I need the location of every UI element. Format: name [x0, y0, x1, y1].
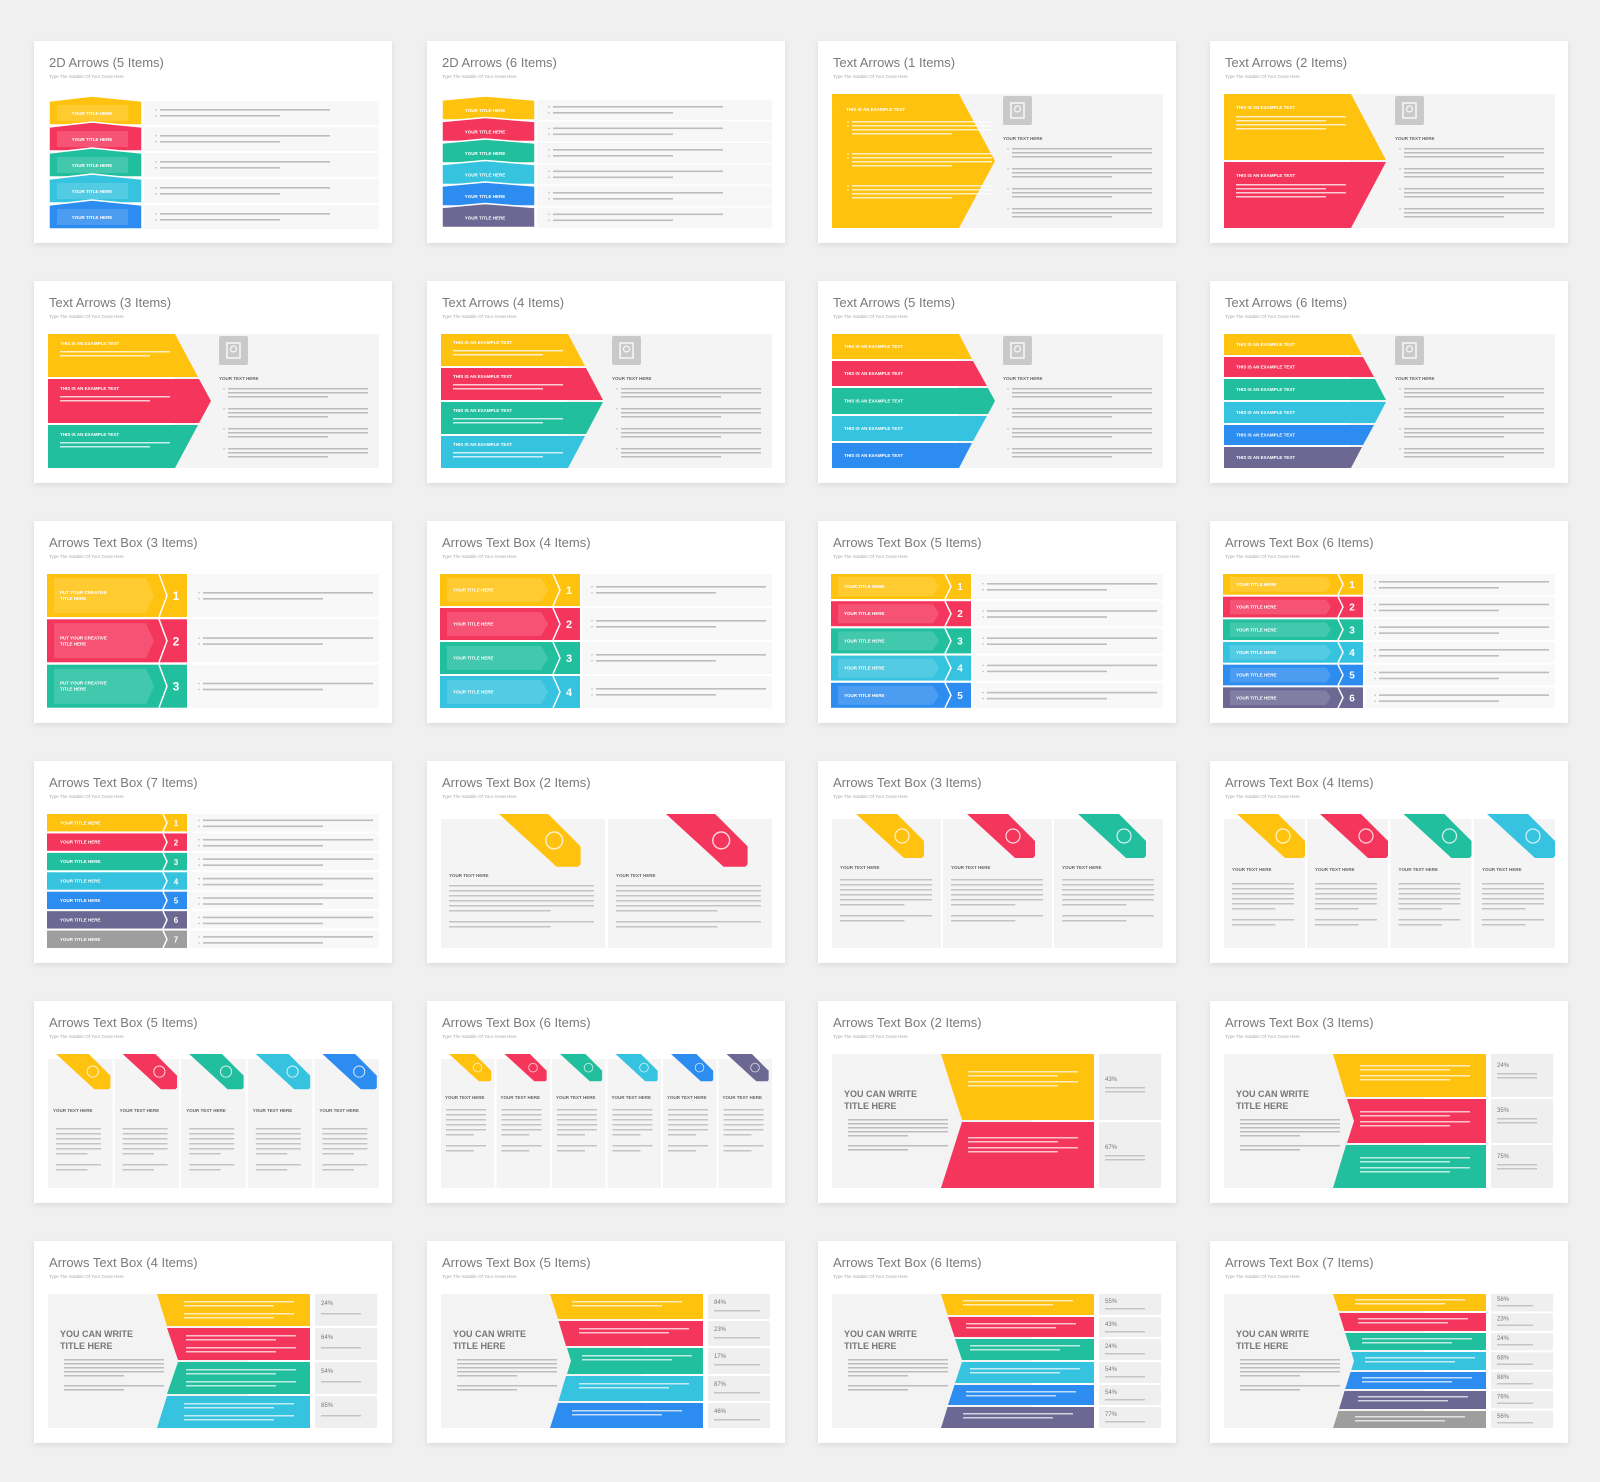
slide 5: Text Arrows (3 Items) [34, 281, 392, 483]
slide 6: Text Arrows (4 Items): THIS IS AN EXAMPLE TEXT [453, 340, 512, 345]
slide 2: 2D Arrows (6 Items): YOUR TITLE HERE [465, 216, 505, 220]
slide 23: Arrows Text Box (6 Items) title panel: 54% [1105, 1390, 1118, 1396]
slide 23: Arrows Text Box (6 Items) title panel: TITLE HERE [844, 1341, 897, 1351]
slide 10: Arrows Text Box (4 Items) numbered: 2 [566, 619, 572, 631]
slide 3: Text Arrows (1 Items): THIS IS AN EXAMPLE TEXT [846, 107, 905, 112]
slide 18: Arrows Text Box (6 Items) columns: YOUR TEXT HERE [500, 1095, 540, 1100]
slide 8: Text Arrows (6 Items): THIS IS AN EXAMPLE TEXT [1236, 387, 1295, 392]
slide 9: Arrows Text Box (3 Items) numbered: TITLE HERE [60, 596, 86, 601]
slide 7: Text Arrows (5 Items): THIS IS AN EXAMPLE TEXT [844, 371, 903, 376]
slide 2: 2D Arrows (6 Items): Type The Subtitle Of Your Great Here [442, 74, 517, 79]
slide 2: 2D Arrows (6 Items): 2D Arrows (6 Items) [442, 55, 557, 70]
slide 24: Arrows Text Box (7 Items) title panel: 68% [1497, 1356, 1510, 1362]
slide 4: Text Arrows (2 Items): THIS IS AN EXAMPLE TEXT [1236, 173, 1295, 178]
slide 15: Arrows Text Box (3 Items) columns: YOUR TEXT HERE [840, 865, 880, 870]
slide 11: Arrows Text Box (5 Items) numbered: Type The Subtitle Of Your Great Here [833, 554, 908, 559]
slide 19: Arrows Text Box (2 Items) title panel [818, 1001, 1176, 1203]
slide 21: Arrows Text Box (4 Items) title panel: 54% [321, 1369, 334, 1375]
slide 1: 2D Arrows (5 Items): 2D Arrows (5 Items) [49, 55, 164, 70]
slide 22: Arrows Text Box (5 Items) title panel: 23% [714, 1327, 727, 1333]
slide 8: Text Arrows (6 Items): YOUR TEXT HERE [1395, 376, 1435, 381]
slide 3: Text Arrows (1 Items): Type The Subtitle Of Your Great Here [833, 74, 908, 79]
slide 12: Arrows Text Box (6 Items) numbered: YOUR TITLE HERE [1236, 627, 1277, 632]
slide 8: Text Arrows (6 Items): THIS IS AN EXAMPLE TEXT [1236, 342, 1295, 347]
slide 12: Arrows Text Box (6 Items) numbered: Type The Subtitle Of Your Great Here [1225, 554, 1300, 559]
slide 6: Text Arrows (4 Items): THIS IS AN EXAMPLE TEXT [453, 442, 512, 447]
slide 21: Arrows Text Box (4 Items) title panel [34, 1241, 392, 1443]
slide 10: Arrows Text Box (4 Items) numbered: Arrows Text Box (4 Items) [442, 535, 591, 550]
slide 13: Arrows Text Box (7 Items) numbered: YOUR TITLE HERE [60, 917, 101, 922]
slide 2: 2D Arrows (6 Items): YOUR TITLE HERE [465, 194, 505, 199]
slide 9: Arrows Text Box (3 Items) numbered: 1 [173, 589, 180, 603]
slide 2: 2D Arrows (6 Items): YOUR TITLE HERE [465, 130, 505, 134]
slide 13: Arrows Text Box (7 Items) numbered: YOUR TITLE HERE [60, 898, 101, 903]
slide 22: Arrows Text Box (5 Items) title panel: YOU CAN WRITE [453, 1329, 526, 1339]
slide 5: Text Arrows (3 Items): THIS IS AN EXAMPLE TEXT [60, 341, 119, 346]
slide 23: Arrows Text Box (6 Items) title panel: 54% [1105, 1367, 1118, 1373]
slide 4: Text Arrows (2 Items) [1210, 41, 1568, 243]
slide 12: Arrows Text Box (6 Items) numbered: 3 [1349, 625, 1355, 636]
slide 17: Arrows Text Box (5 Items) columns: Arrows Text Box (5 Items) [49, 1015, 198, 1030]
slide 20: Arrows Text Box (3 Items) title panel: YOU CAN WRITE [1236, 1089, 1309, 1099]
slide 3: Text Arrows (1 Items) [818, 41, 1176, 243]
slide 24: Arrows Text Box (7 Items) title panel: 76% [1497, 1394, 1510, 1400]
slide 11: Arrows Text Box (5 Items) numbered: 2 [957, 609, 963, 620]
slide 7: Text Arrows (5 Items): THIS IS AN EXAMPLE TEXT [844, 398, 903, 404]
slide 9: Arrows Text Box (3 Items) numbered: PUT YOUR CREATIVE [60, 681, 107, 686]
slide 15: Arrows Text Box (3 Items) columns: YOUR TEXT HERE [951, 865, 991, 870]
slide 23: Arrows Text Box (6 Items) title panel: 55% [1105, 1299, 1118, 1305]
slide 16: Arrows Text Box (4 Items) columns: Arrows Text Box (4 Items) [1225, 775, 1374, 790]
slide 16: Arrows Text Box (4 Items) columns: YOUR TEXT HERE [1482, 867, 1522, 872]
slide 6: Text Arrows (4 Items) [427, 281, 785, 483]
slide 8: Text Arrows (6 Items): THIS IS AN EXAMPLE TEXT [1236, 364, 1295, 370]
slide 13: Arrows Text Box (7 Items) numbered: Arrows Text Box (7 Items) [49, 775, 198, 790]
slide 18: Arrows Text Box (6 Items) columns: YOUR TEXT HERE [667, 1095, 707, 1100]
slide 11: Arrows Text Box (5 Items) numbered: 4 [957, 664, 963, 675]
slide 5: Text Arrows (3 Items): YOUR TEXT HERE [219, 376, 259, 381]
slide 19: Arrows Text Box (2 Items) title panel: YOU CAN WRITE [844, 1089, 917, 1099]
slide 22: Arrows Text Box (5 Items) title panel: TITLE HERE [453, 1341, 506, 1351]
slide 13: Arrows Text Box (7 Items) numbered: 3 [174, 858, 179, 867]
slide 10: Arrows Text Box (4 Items) numbered [427, 521, 785, 723]
slide 17: Arrows Text Box (5 Items) columns: YOUR TEXT HERE [253, 1108, 292, 1113]
slide 14: Arrows Text Box (2 Items) columns: Arrows Text Box (2 Items) [442, 775, 591, 790]
slide 23: Arrows Text Box (6 Items) title panel: Type The Subtitle Of Your Great Here [833, 1274, 908, 1279]
slide 16: Arrows Text Box (4 Items) columns: YOUR TEXT HERE [1232, 867, 1272, 872]
slide 8: Text Arrows (6 Items): Type The Subtitle Of Your Great Here [1225, 314, 1300, 319]
slide 8: Text Arrows (6 Items): THIS IS AN EXAMPLE TEXT [1236, 455, 1295, 460]
slide 12: Arrows Text Box (6 Items) numbered: 1 [1349, 580, 1355, 591]
slide 19: Arrows Text Box (2 Items) title panel: Type The Subtitle Of Your Great Here [833, 1034, 908, 1039]
slide 11: Arrows Text Box (5 Items) numbered: YOUR TITLE HERE [844, 638, 885, 643]
slide 5: Text Arrows (3 Items): THIS IS AN EXAMPLE TEXT [60, 432, 119, 437]
slide 1: 2D Arrows (5 Items): Type The Subtitle Of Your Great Here [49, 74, 124, 79]
slide 21: Arrows Text Box (4 Items) title panel: 85% [321, 1403, 334, 1409]
slide 3: Text Arrows (1 Items): Text Arrows (1 Items) [833, 55, 955, 70]
slide 18: Arrows Text Box (6 Items) columns: Arrows Text Box (6 Items) [442, 1015, 591, 1030]
slide 13: Arrows Text Box (7 Items) numbered: 5 [174, 897, 179, 906]
slide 24: Arrows Text Box (7 Items) title panel: YOU CAN WRITE [1236, 1329, 1309, 1339]
slide 2: 2D Arrows (6 Items): YOUR TITLE HERE [465, 151, 505, 156]
slide 9: Arrows Text Box (3 Items) numbered: TITLE HERE [60, 641, 86, 646]
slide 11: Arrows Text Box (5 Items) numbered: 5 [957, 691, 963, 702]
slide 8: Text Arrows (6 Items): THIS IS AN EXAMPLE TEXT [1236, 432, 1295, 438]
slide 12: Arrows Text Box (6 Items) numbered: YOUR TITLE HERE [1236, 605, 1277, 610]
slide 7: Text Arrows (5 Items): YOUR TEXT HERE [1003, 376, 1043, 381]
slide 11: Arrows Text Box (5 Items) numbered: Arrows Text Box (5 Items) [833, 535, 982, 550]
slide 11: Arrows Text Box (5 Items) numbered: 1 [957, 582, 963, 593]
slide 13: Arrows Text Box (7 Items) numbered: YOUR TITLE HERE [60, 879, 101, 884]
slide 9: Arrows Text Box (3 Items) numbered: PUT YOUR CREATIVE [60, 635, 107, 640]
slide 19: Arrows Text Box (2 Items) title panel: TITLE HERE [844, 1101, 897, 1111]
slide 7: Text Arrows (5 Items) [818, 281, 1176, 483]
slide 12: Arrows Text Box (6 Items) numbered: 2 [1349, 603, 1355, 614]
slide 9: Arrows Text Box (3 Items) numbered: 3 [173, 680, 180, 694]
slide 13: Arrows Text Box (7 Items) numbered: YOUR TITLE HERE [60, 937, 101, 942]
slide 21: Arrows Text Box (4 Items) title panel: Type The Subtitle Of Your Great Here [49, 1274, 124, 1279]
slide 22: Arrows Text Box (5 Items) title panel: 84% [714, 1300, 727, 1306]
slide 12: Arrows Text Box (6 Items) numbered: Arrows Text Box (6 Items) [1225, 535, 1374, 550]
slide 10: Arrows Text Box (4 Items) numbered: YOUR TITLE HERE [453, 656, 494, 661]
slide 24: Arrows Text Box (7 Items) title panel: 24% [1497, 1336, 1510, 1342]
slide 18: Arrows Text Box (6 Items) columns: YOUR TEXT HERE [612, 1095, 651, 1100]
slide 7: Text Arrows (5 Items): THIS IS AN EXAMPLE TEXT [844, 344, 903, 349]
slide 18: Arrows Text Box (6 Items) columns: YOUR TEXT HERE [722, 1095, 762, 1100]
slide 17: Arrows Text Box (5 Items) columns [34, 1001, 392, 1203]
slide 17: Arrows Text Box (5 Items) columns: Type The Subtitle Of Your Great Here [49, 1034, 124, 1039]
slide 23: Arrows Text Box (6 Items) title panel [818, 1241, 1176, 1443]
slide 15: Arrows Text Box (3 Items) columns: Arrows Text Box (3 Items) [833, 775, 982, 790]
slide 11: Arrows Text Box (5 Items) numbered: 3 [957, 636, 963, 647]
slide 22: Arrows Text Box (5 Items) title panel: 87% [714, 1382, 727, 1388]
slide 6: Text Arrows (4 Items): YOUR TEXT HERE [612, 376, 652, 381]
slide 14: Arrows Text Box (2 Items) columns: Type The Subtitle Of Your Great Here [442, 794, 517, 799]
slide 17: Arrows Text Box (5 Items) columns: YOUR TEXT HERE [53, 1108, 93, 1113]
slide 8: Text Arrows (6 Items) [1210, 281, 1568, 483]
slide 13: Arrows Text Box (7 Items) numbered: YOUR TITLE HERE [60, 820, 101, 825]
slide 1: 2D Arrows (5 Items) [34, 41, 392, 243]
slide 1: 2D Arrows (5 Items): YOUR TITLE HERE [72, 163, 112, 168]
slide 15: Arrows Text Box (3 Items) columns [818, 761, 1176, 963]
slide 20: Arrows Text Box (3 Items) title panel: 35% [1497, 1108, 1510, 1114]
slide 24: Arrows Text Box (7 Items) title panel: 23% [1497, 1316, 1510, 1322]
slide 24: Arrows Text Box (7 Items) title panel: 56% [1497, 1297, 1510, 1303]
slide 21: Arrows Text Box (4 Items) title panel: TITLE HERE [60, 1341, 113, 1351]
slide 6: Text Arrows (4 Items): Type The Subtitle Of Your Great Here [442, 314, 517, 319]
slide 24: Arrows Text Box (7 Items) title panel: TITLE HERE [1236, 1341, 1289, 1351]
slide 13: Arrows Text Box (7 Items) numbered: Type The Subtitle Of Your Great Here [49, 794, 124, 799]
slide 7: Text Arrows (5 Items): THIS IS AN EXAMPLE TEXT [844, 426, 903, 431]
slide 14: Arrows Text Box (2 Items) columns [427, 761, 785, 963]
slide 12: Arrows Text Box (6 Items) numbered: 6 [1349, 693, 1355, 704]
slide 20: Arrows Text Box (3 Items) title panel: Type The Subtitle Of Your Great Here [1225, 1034, 1300, 1039]
slide 12: Arrows Text Box (6 Items) numbered: YOUR TITLE HERE [1236, 673, 1277, 678]
slide 6: Text Arrows (4 Items): THIS IS AN EXAMPLE TEXT [453, 374, 512, 379]
slide 2: 2D Arrows (6 Items): YOUR TITLE HERE [465, 172, 505, 178]
slide 1: 2D Arrows (5 Items): YOUR TITLE HERE [72, 137, 112, 142]
slide 7: Text Arrows (5 Items): Text Arrows (5 Items) [833, 295, 955, 310]
slide 9: Arrows Text Box (3 Items) numbered: Type The Subtitle Of Your Great Here [49, 554, 124, 559]
slide 6: Text Arrows (4 Items): THIS IS AN EXAMPLE TEXT [453, 408, 512, 413]
slide 23: Arrows Text Box (6 Items) title panel: 77% [1105, 1412, 1118, 1418]
slide 13: Arrows Text Box (7 Items) numbered: 6 [174, 916, 179, 925]
slide 16: Arrows Text Box (4 Items) columns [1210, 761, 1568, 963]
slide 10: Arrows Text Box (4 Items) numbered: YOUR TITLE HERE [453, 690, 494, 695]
slide 9: Arrows Text Box (3 Items) numbered: PUT YOUR CREATIVE [60, 590, 107, 595]
slide 10: Arrows Text Box (4 Items) numbered: Type The Subtitle Of Your Great Here [442, 554, 517, 559]
slide 11: Arrows Text Box (5 Items) numbered: YOUR TITLE HERE [844, 584, 885, 589]
slide 15: Arrows Text Box (3 Items) columns: YOUR TEXT HERE [1062, 865, 1102, 870]
slide 23: Arrows Text Box (6 Items) title panel: Arrows Text Box (6 Items) [833, 1255, 982, 1270]
slide 8: Text Arrows (6 Items): THIS IS AN EXAMPLE TEXT [1236, 410, 1295, 415]
slide 16: Arrows Text Box (4 Items) columns: YOUR TEXT HERE [1315, 867, 1355, 872]
slide 23: Arrows Text Box (6 Items) title panel: 43% [1105, 1322, 1118, 1328]
slide 11: Arrows Text Box (5 Items) numbered: YOUR TITLE HERE [844, 693, 885, 698]
slide 2: 2D Arrows (6 Items): YOUR TITLE HERE [465, 108, 505, 113]
slide 22: Arrows Text Box (5 Items) title panel: 17% [714, 1354, 727, 1360]
slide 22: Arrows Text Box (5 Items) title panel: Type The Subtitle Of Your Great Here [442, 1274, 517, 1279]
slide 13: Arrows Text Box (7 Items) numbered: YOUR TITLE HERE [60, 840, 101, 845]
slide 22: Arrows Text Box (5 Items) title panel: Arrows Text Box (5 Items) [442, 1255, 591, 1270]
slide 21: Arrows Text Box (4 Items) title panel: 24% [321, 1301, 334, 1307]
slide 24: Arrows Text Box (7 Items) title panel: Arrows Text Box (7 Items) [1225, 1255, 1374, 1270]
slide 24: Arrows Text Box (7 Items) title panel: 88% [1497, 1375, 1510, 1381]
slide 9: Arrows Text Box (3 Items) numbered: 2 [173, 634, 180, 648]
slide 10: Arrows Text Box (4 Items) numbered: YOUR TITLE HERE [453, 588, 494, 593]
slide 20: Arrows Text Box (3 Items) title panel: TITLE HERE [1236, 1101, 1289, 1111]
slide 18: Arrows Text Box (6 Items) columns: YOUR TEXT HERE [556, 1095, 596, 1100]
slide 12: Arrows Text Box (6 Items) numbered: YOUR TITLE HERE [1236, 582, 1277, 587]
slide 4: Text Arrows (2 Items): Type The Subtitle Of Your Great Here [1225, 74, 1300, 79]
slide 15: Arrows Text Box (3 Items) columns: Type The Subtitle Of Your Great Here [833, 794, 908, 799]
slide 17: Arrows Text Box (5 Items) columns: YOUR TEXT HERE [120, 1108, 159, 1113]
slide 11: Arrows Text Box (5 Items) numbered [818, 521, 1176, 723]
slide 13: Arrows Text Box (7 Items) numbered: 7 [174, 936, 179, 945]
slide 24: Arrows Text Box (7 Items) title panel: 56% [1497, 1414, 1510, 1420]
slide 9: Arrows Text Box (3 Items) numbered: TITLE HERE [60, 687, 86, 692]
slide 4: Text Arrows (2 Items): Text Arrows (2 Items) [1225, 55, 1347, 70]
slide 12: Arrows Text Box (6 Items) numbered [1210, 521, 1568, 723]
slide 20: Arrows Text Box (3 Items) title panel: 24% [1497, 1063, 1510, 1069]
slide 5: Text Arrows (3 Items): THIS IS AN EXAMPLE TEXT [60, 386, 119, 391]
slide 3: Text Arrows (1 Items): YOUR TEXT HERE [1003, 136, 1043, 141]
slide 20: Arrows Text Box (3 Items) title panel: Arrows Text Box (3 Items) [1225, 1015, 1374, 1030]
slide 1: 2D Arrows (5 Items): YOUR TITLE HERE [72, 111, 112, 116]
slide 20: Arrows Text Box (3 Items) title panel [1210, 1001, 1568, 1203]
slide 6: Text Arrows (4 Items): Text Arrows (4 Items) [442, 295, 564, 310]
slide 18: Arrows Text Box (6 Items) columns: Type The Subtitle Of Your Great Here [442, 1034, 517, 1039]
slide 20: Arrows Text Box (3 Items) title panel: 75% [1497, 1154, 1510, 1160]
slide 12: Arrows Text Box (6 Items) numbered: YOUR TITLE HERE [1236, 695, 1277, 700]
slide 19: Arrows Text Box (2 Items) title panel: Arrows Text Box (2 Items) [833, 1015, 982, 1030]
slide 18: Arrows Text Box (6 Items) columns: YOUR TEXT HERE [445, 1095, 485, 1100]
slide 17: Arrows Text Box (5 Items) columns: YOUR TEXT HERE [319, 1108, 359, 1113]
slide 10: Arrows Text Box (4 Items) numbered: 4 [566, 687, 573, 699]
slide 9: Arrows Text Box (3 Items) numbered: Arrows Text Box (3 Items) [49, 535, 198, 550]
slide 13: Arrows Text Box (7 Items) numbered: 2 [174, 838, 179, 847]
slide 2: 2D Arrows (6 Items) [427, 41, 785, 243]
slide 23: Arrows Text Box (6 Items) title panel: 24% [1105, 1344, 1118, 1350]
slide 9: Arrows Text Box (3 Items) numbered [34, 521, 392, 723]
slide 1: 2D Arrows (5 Items): YOUR TITLE HERE [72, 215, 112, 220]
slide 10: Arrows Text Box (4 Items) numbered: YOUR TITLE HERE [453, 622, 494, 627]
slide 22: Arrows Text Box (5 Items) title panel: 46% [714, 1409, 727, 1415]
slide 13: Arrows Text Box (7 Items) numbered: 1 [174, 819, 179, 828]
slide 17: Arrows Text Box (5 Items) columns: YOUR TEXT HERE [186, 1108, 226, 1113]
slide 24: Arrows Text Box (7 Items) title panel: Type The Subtitle Of Your Great Here [1225, 1274, 1300, 1279]
slide 12: Arrows Text Box (6 Items) numbered: YOUR TITLE HERE [1236, 650, 1277, 655]
slide 10: Arrows Text Box (4 Items) numbered: 3 [566, 653, 572, 665]
slide 13: Arrows Text Box (7 Items) numbered: 4 [174, 877, 179, 886]
slide 1: 2D Arrows (5 Items): YOUR TITLE HERE [72, 189, 112, 194]
slide 4: Text Arrows (2 Items): YOUR TEXT HERE [1395, 136, 1435, 141]
slide 8: Text Arrows (6 Items): Text Arrows (6 Items) [1225, 295, 1347, 310]
slide 5: Text Arrows (3 Items): Type The Subtitle Of Your Great Here [49, 314, 124, 319]
slide 13: Arrows Text Box (7 Items) numbered [34, 761, 392, 963]
slide 19: Arrows Text Box (2 Items) title panel: 67% [1105, 1145, 1118, 1151]
slide 7: Text Arrows (5 Items): Type The Subtitle Of Your Great Here [833, 314, 908, 319]
slide 22: Arrows Text Box (5 Items) title panel [427, 1241, 785, 1443]
slide 21: Arrows Text Box (4 Items) title panel: YOU CAN WRITE [60, 1329, 133, 1339]
slide 13: Arrows Text Box (7 Items) numbered: YOUR TITLE HERE [60, 859, 101, 864]
slide 11: Arrows Text Box (5 Items) numbered: YOUR TITLE HERE [844, 666, 885, 671]
slide 5: Text Arrows (3 Items): Text Arrows (3 Items) [49, 295, 171, 310]
slide 7: Text Arrows (5 Items): THIS IS AN EXAMPLE TEXT [844, 453, 903, 458]
slide 12: Arrows Text Box (6 Items) numbered: 5 [1349, 671, 1355, 682]
slide 16: Arrows Text Box (4 Items) columns: Type The Subtitle Of Your Great Here [1225, 794, 1300, 799]
slide 10: Arrows Text Box (4 Items) numbered: 1 [566, 585, 572, 597]
slide 12: Arrows Text Box (6 Items) numbered: 4 [1349, 648, 1355, 659]
slide 21: Arrows Text Box (4 Items) title panel: Arrows Text Box (4 Items) [49, 1255, 198, 1270]
slide 4: Text Arrows (2 Items): THIS IS AN EXAMPLE TEXT [1236, 105, 1295, 110]
slide 14: Arrows Text Box (2 Items) columns: YOUR TEXT HERE [616, 873, 656, 878]
slide 21: Arrows Text Box (4 Items) title panel: 64% [321, 1335, 334, 1341]
slide 19: Arrows Text Box (2 Items) title panel: 43% [1105, 1077, 1118, 1083]
slide 14: Arrows Text Box (2 Items) columns: YOUR TEXT HERE [449, 873, 489, 878]
slide 23: Arrows Text Box (6 Items) title panel: YOU CAN WRITE [844, 1329, 917, 1339]
slide 24: Arrows Text Box (7 Items) title panel [1210, 1241, 1568, 1443]
slide 18: Arrows Text Box (6 Items) columns [427, 1001, 785, 1203]
slide 16: Arrows Text Box (4 Items) columns: YOUR TEXT HERE [1398, 867, 1438, 872]
slide 11: Arrows Text Box (5 Items) numbered: YOUR TITLE HERE [844, 611, 885, 616]
